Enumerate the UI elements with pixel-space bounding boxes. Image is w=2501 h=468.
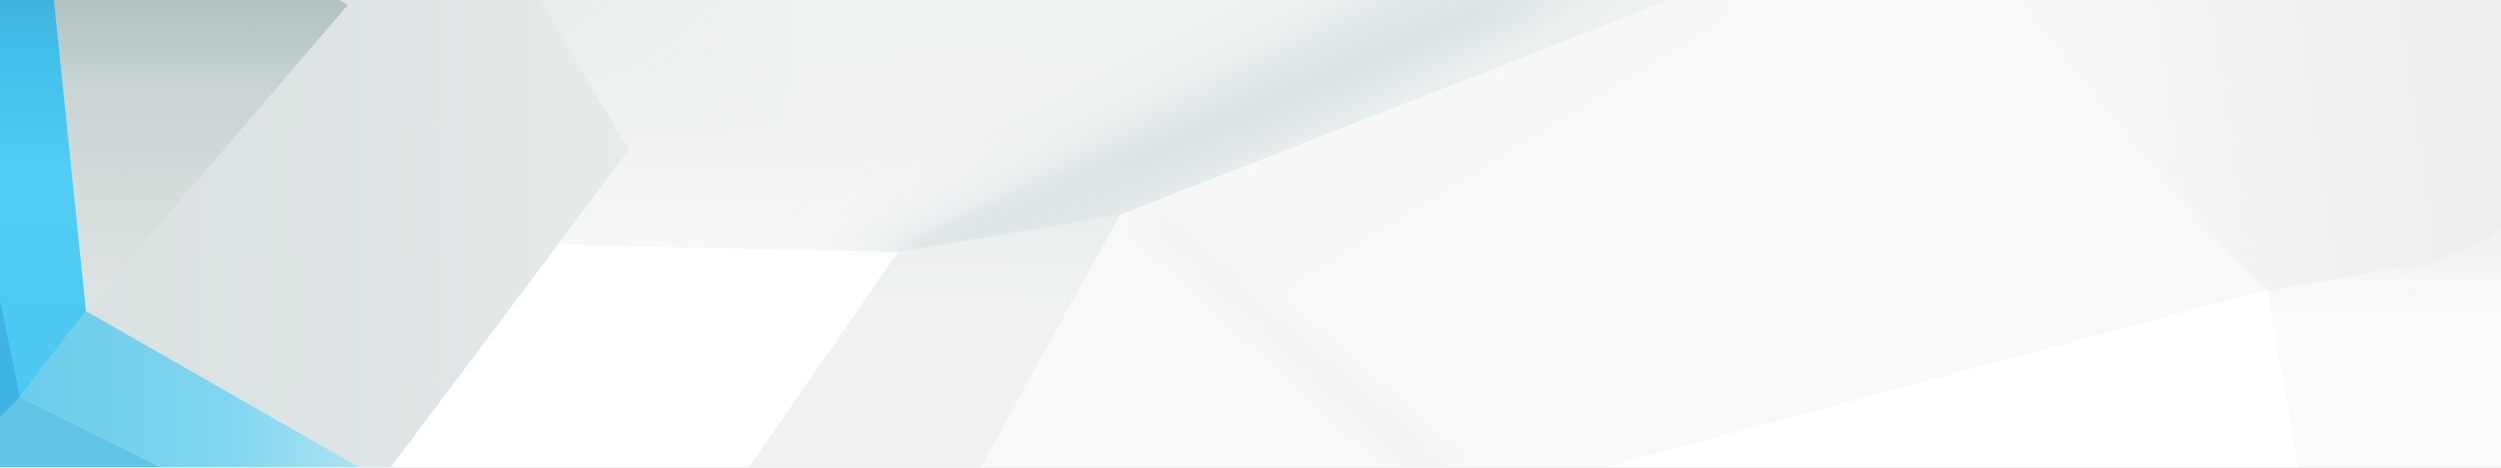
panel: blue vertical strip	[0, 0, 86, 417]
panel: light blue floor	[20, 311, 359, 467]
panel: vertical strip below crease	[749, 215, 1120, 467]
bottom edge line	[0, 467, 2501, 468]
panel: upper fold with diagonal crease	[540, 0, 1669, 252]
panel: white quadrilateral	[380, 245, 898, 467]
panel: lower right plane with curved crease	[2400, 222, 2501, 268]
panel: white triangle	[1606, 290, 2298, 467]
panel: blue corner triangle	[0, 397, 160, 467]
panel: top right shaded plane	[2276, 0, 2501, 282]
panel: large pale plane	[1136, 193, 1456, 467]
panel: grey triangle	[54, 0, 348, 311]
panel: dark blue sliver	[0, 300, 20, 417]
panel: central grey plane	[86, 0, 629, 467]
